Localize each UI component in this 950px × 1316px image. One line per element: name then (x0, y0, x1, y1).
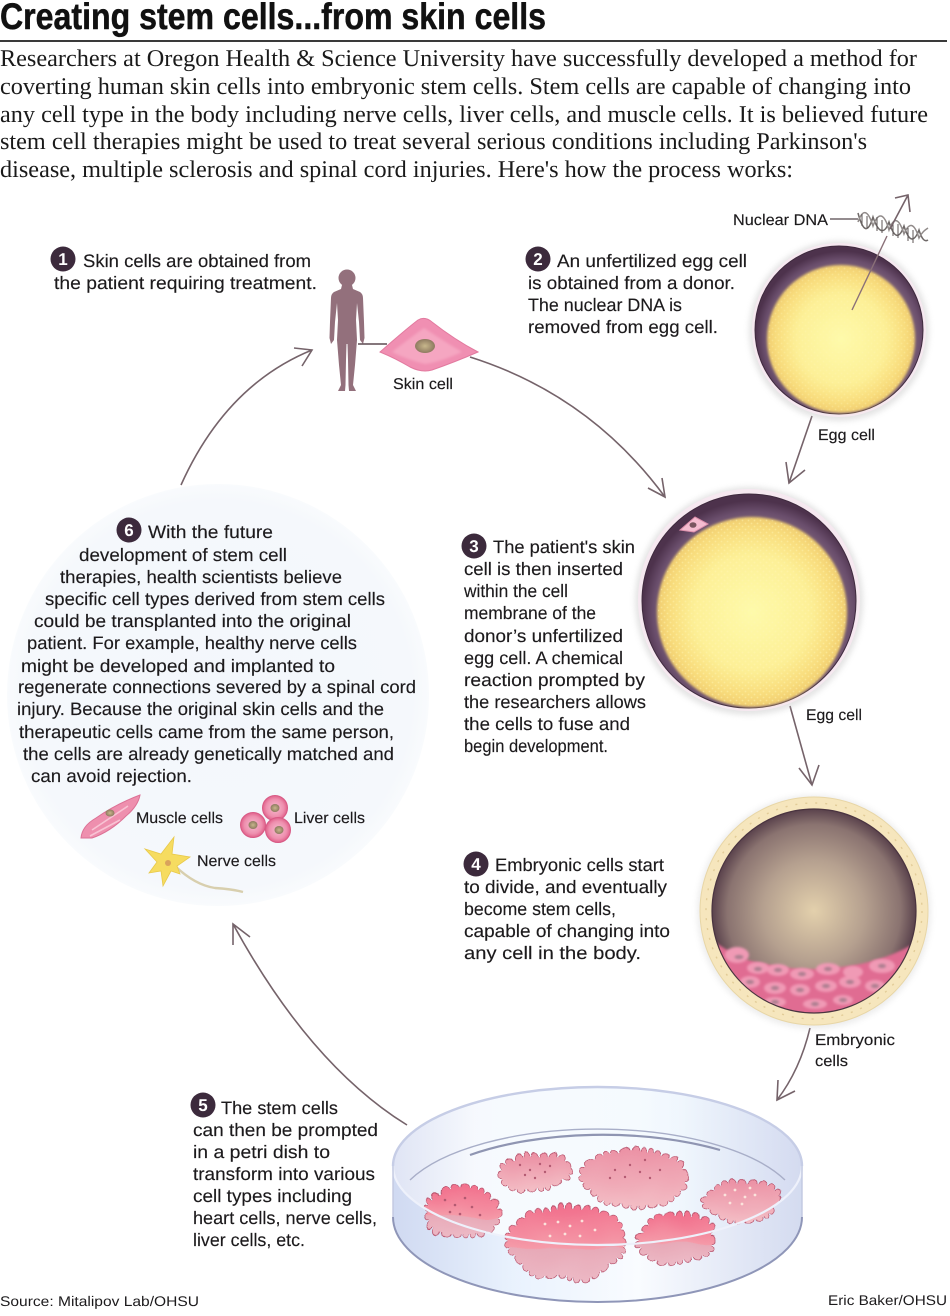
step 3 text: donor’s unfertilized (464, 626, 623, 646)
artist credit: Eric Baker/OHSU (828, 1292, 947, 1308)
label: egg cell 3: Egg cell (806, 707, 862, 724)
step 6 text: With the future (148, 522, 273, 542)
step 2 text: An unfertilized egg cell (557, 251, 747, 271)
step 5 text: can then be prompted (193, 1120, 378, 1140)
intro text: stem cell therapies might be used to treat several serious conditions including Parkinson's (0, 129, 867, 155)
step 6 text (17, 518, 416, 786)
step 6 text: 6 (124, 521, 134, 540)
arrow: egg cell down to fused egg (786, 416, 812, 483)
icon: muscle cell (81, 795, 140, 838)
step 3 text: the cells to fuse and (464, 714, 630, 734)
step 2 text: 2 (533, 250, 543, 269)
step 6 text: patient. For example, healthy nerve cells (27, 633, 357, 653)
step 3 text: within the cell (463, 581, 568, 601)
step 6 text: development of stem cell (79, 545, 287, 565)
step 4 text: capable of changing into (464, 921, 670, 941)
step 6 text: therapeutic cells came from the same person, (19, 722, 394, 742)
label: egg cell: Egg cell (818, 427, 875, 444)
step 2 text: The nuclear DNA is (528, 295, 682, 315)
step 6 text: the cells are already genetically matched and (23, 744, 394, 764)
step 5 text: liver cells, etc. (193, 1230, 305, 1250)
arrow: embryo to dish (777, 1028, 810, 1100)
label: muscle cells: Muscle cells (136, 810, 223, 827)
icon: DNA helix (858, 213, 928, 243)
label: nerve cells: Nerve cells (197, 853, 276, 870)
step 4 text: to divide, and eventually (464, 877, 667, 897)
step 5 text: cell types including (193, 1186, 352, 1206)
step 1 text: the patient requiring treatment. (54, 273, 317, 293)
step 3 text: The patient's skin (493, 537, 635, 557)
step 2 text: removed from egg cell. (528, 317, 718, 337)
step 2 text: is obtained from a donor. (528, 273, 735, 293)
arrow: dish to bubble (233, 924, 407, 1125)
step 4 text: become stem cells, (464, 899, 616, 919)
intro text: disease, multiple sclerosis and spinal cord injuries. Here's how the process works: (0, 157, 793, 183)
step 2 text (526, 246, 747, 337)
step 5 text: The stem cells (221, 1098, 338, 1118)
icon: liver cells (240, 796, 290, 842)
intro text: coverting human skin cells into embryonic stem cells. Stem cells are capable of changing into (0, 74, 911, 100)
intro text (0, 46, 928, 183)
step 6 text: injury. Because the original skin cells and the (17, 699, 384, 719)
step 5 text: transform into various (193, 1164, 375, 1184)
icon: patient figure (330, 270, 364, 391)
step 4 text: Embryonic cells start (495, 855, 664, 875)
step 6 text: therapies, health scientists believe (60, 567, 342, 587)
label: embryonic cells (815, 1032, 895, 1070)
step 1 text (50, 246, 317, 293)
icon: nerve cell (145, 837, 243, 892)
step 3 text: begin development. (464, 736, 608, 756)
step 4 text (464, 852, 670, 963)
intro text: Researchers at Oregon Health & Science University have successfully developed a method for (0, 46, 917, 72)
label: embryonic cells: cells (815, 1053, 848, 1070)
step 1 text: Skin cells are obtained from (83, 251, 311, 271)
step 4 text: any cell in the body. (464, 943, 641, 963)
step 6 text: could be transplanted into the original (34, 611, 351, 631)
step 5 text: in a petri dish to (193, 1142, 330, 1162)
step 4 text: 4 (471, 855, 481, 874)
arrow: DNA removed from egg (852, 195, 910, 310)
icon: fused egg with inserted skin cell (635, 487, 863, 715)
step 3 text: reaction prompted by (464, 670, 645, 690)
step 3 text: 3 (469, 537, 479, 556)
step 6 text: regenerate connections severed by a spinal cord (18, 677, 416, 697)
icon: embryo with embryonic cells (697, 795, 931, 1029)
icon: petri dish with cell colonies (393, 1087, 802, 1302)
label: nuclear DNA: Nuclear DNA (733, 212, 829, 229)
arrow: fused egg to embryo (790, 706, 819, 785)
label: embryonic cells: Embryonic (815, 1032, 895, 1049)
label: liver cells: Liver cells (294, 810, 365, 827)
step 3 text: egg cell. A chemical (464, 648, 623, 668)
step 5 text: 5 (198, 1096, 208, 1115)
step 5 text (190, 1092, 378, 1250)
source credit: Source: Mitalipov Lab/OHSU (0, 1293, 199, 1309)
label: skin cell: Skin cell (393, 376, 453, 393)
step 6 text: can avoid rejection. (31, 766, 192, 786)
icon: skin cell (380, 318, 478, 371)
step 6 text: might be developed and implanted to (21, 656, 335, 676)
step 3 text: the researchers allows (464, 692, 646, 712)
step 5 text: heart cells, nerve cells, (193, 1208, 377, 1228)
arrow: bubble to patient (181, 348, 312, 485)
arrow: skin cell to egg (470, 357, 665, 497)
step 3 text: membrane of the (464, 603, 596, 623)
icon: egg cell (749, 241, 929, 421)
intro text: any cell type in the body including nerve cells, liver cells, and muscle cells. It is believed future (0, 102, 928, 128)
panel: step 6 bubble (7, 484, 429, 906)
step 3 text (462, 534, 646, 756)
step 6 text: specific cell types derived from stem cells (45, 589, 385, 609)
step 3 text: cell is then inserted (464, 559, 623, 579)
step 1 text: 1 (58, 250, 68, 269)
